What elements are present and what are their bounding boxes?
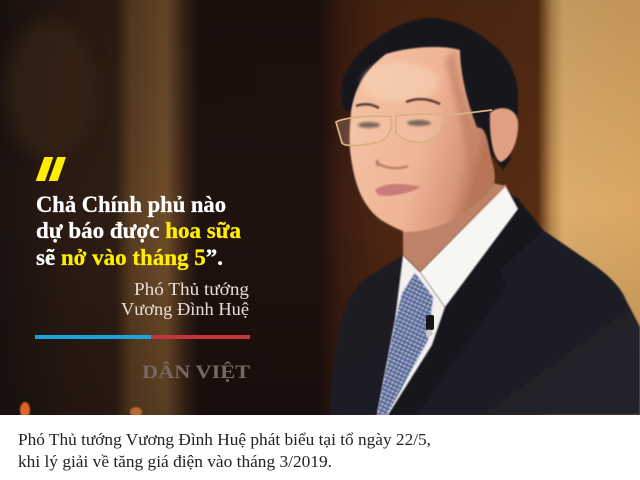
watermark logo: DÂN VIỆT [142, 361, 250, 383]
lapel microphone [426, 315, 434, 336]
ear [490, 108, 518, 162]
quote text: Chả Chính phủ nào [36, 192, 226, 217]
shirt collar [420, 185, 518, 307]
lapel [386, 198, 543, 415]
caption text: khi lý giải về tăng giá điện vào tháng 3/2019. [18, 452, 332, 471]
hair [341, 18, 518, 170]
caption text: Phó Thủ tướng Vương Đình Huệ phát biểu tại tổ ngày 22/5, [18, 430, 431, 449]
mouth [375, 184, 421, 196]
shirt front [377, 255, 445, 415]
temple shadow [445, 50, 477, 170]
photo: portrait of the speaker [329, 18, 640, 415]
attribution: Phó Thủ tướng [134, 279, 249, 299]
glasses [336, 110, 492, 146]
divider rule: blue and red [35, 335, 250, 339]
face [350, 47, 495, 232]
attribution: Vương Đình Huệ [121, 299, 249, 319]
suit jacket [329, 190, 640, 415]
neck [403, 183, 506, 272]
nose shading [377, 160, 408, 168]
quote text: sẽ nở vào tháng 5”. [36, 245, 223, 270]
caption panel [0, 415, 640, 480]
attribution [121, 279, 249, 319]
eyebrows [356, 99, 440, 108]
caption text [18, 430, 431, 471]
eyes [358, 120, 431, 128]
quotation mark icon [36, 157, 66, 181]
quote text: dự báo được hoa sữa [36, 218, 241, 243]
quote text [36, 192, 241, 270]
forehead highlight [362, 62, 438, 102]
necktie [377, 273, 433, 415]
